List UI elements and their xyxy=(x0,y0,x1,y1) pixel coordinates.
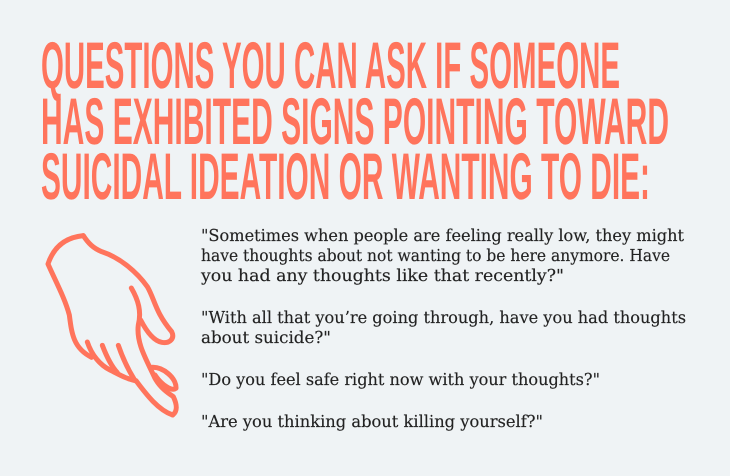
question text block: you had any thoughts like that recently?" xyxy=(200,266,564,285)
question text block: have thoughts about not wanting to be here anymore. Have xyxy=(201,246,670,265)
question text block: "With all that you’re going through, have you had thoughts xyxy=(201,308,686,327)
question text block xyxy=(200,226,686,431)
icon: pointing hand xyxy=(48,236,176,415)
question text block: about suicide?" xyxy=(201,328,331,347)
title xyxy=(41,28,669,213)
question text block: "Are you thinking about killing yourself?" xyxy=(201,412,543,431)
question text block: "Sometimes when people are feeling really low, they might xyxy=(201,226,684,245)
question text block: "Do you feel safe right now with your thoughts?" xyxy=(201,370,600,389)
